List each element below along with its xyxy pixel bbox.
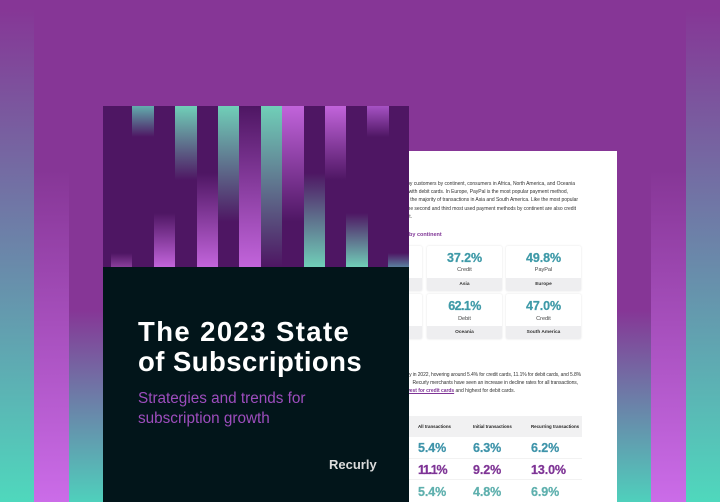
row: debit: 11.1% [418, 463, 446, 477]
card: Oceania: 62.1% [448, 299, 481, 313]
card: Oceania: Debit [458, 316, 471, 322]
card: Oceania [427, 294, 502, 339]
cover subtitle: Strategies and trends for [138, 390, 306, 407]
Recurly logo: Recurly [329, 457, 377, 472]
table [409, 416, 582, 499]
cover subtitle [138, 390, 306, 427]
card: hidden left top [350, 246, 422, 291]
table: 6.2% [531, 441, 559, 455]
decline rate paragraph: west for credit cards and highest for debit cards. [406, 388, 515, 394]
background stripe: right outer teal [686, 8, 720, 502]
card: Asia: 37.2% [447, 251, 482, 265]
table: 6.9% [531, 485, 559, 499]
report cover [103, 106, 409, 502]
background stripe: left outer teal [0, 8, 34, 502]
card: South America [506, 294, 581, 339]
table: 4.8% [473, 485, 501, 499]
card: South America: Credit [536, 316, 551, 322]
table: 9.2% [473, 463, 501, 477]
background stripe: right inner teal [617, 310, 651, 502]
card: Europe: PayPal [535, 267, 552, 273]
decline rate paragraph: ly in 2022, hovering around 5.4% for credit cards, 11.1% for debit cards, and 5.8% [408, 372, 581, 378]
table: All transactions [418, 424, 451, 429]
background stripe: left inner teal [69, 310, 103, 502]
intro paragraph: the second and third most used payment methods by continent are also credit [406, 206, 576, 212]
intro paragraph: by customers by continent, consumers in Africa, North America, and Oceania [407, 181, 575, 187]
card: Europe [506, 246, 581, 291]
row: credit: 5.4% [418, 441, 446, 455]
table: 6.3% [473, 441, 501, 455]
card: Europe: Europe [535, 282, 552, 287]
decline rate paragraph [406, 372, 581, 394]
card: Europe: 49.8% [526, 251, 561, 265]
cover title: of Subscriptions [138, 346, 362, 377]
table: Initial transactions [473, 424, 512, 429]
cover striped art [103, 106, 409, 267]
card: hidden left bottom [350, 294, 422, 339]
section heading: by continent: by continent [409, 232, 442, 238]
cover subtitle: subscription growth [138, 410, 270, 427]
intro paragraph [406, 181, 578, 220]
card: Oceania: Oceania [455, 330, 474, 335]
card: Asia: Credit [457, 267, 472, 273]
card: Asia [427, 246, 502, 291]
cover title [138, 316, 362, 377]
table: 13.0% [531, 463, 566, 477]
report page behind the cover [380, 151, 617, 502]
table header [380, 416, 582, 437]
background stripe: left pink [34, 170, 69, 502]
intro paragraph: with debit cards. In Europe, PayPal is the most popular payment method, [409, 189, 568, 195]
row: other: 5.4% [418, 485, 446, 499]
card: South America: South America [527, 330, 560, 335]
decline rate paragraph: Recurly merchants have seen an increase in decline rates for all transactions, [412, 380, 578, 386]
intro paragraph: t. [409, 214, 412, 220]
card: Asia: Asia [459, 282, 470, 287]
background stripe: right pink [651, 170, 686, 502]
cover title: The 2023 State [138, 316, 350, 347]
intro paragraph: the majority of transactions in Asia and South America. Like the most popular [410, 197, 578, 203]
card: South America: 47.0% [526, 299, 561, 313]
table: Recurring transactions [531, 424, 579, 429]
